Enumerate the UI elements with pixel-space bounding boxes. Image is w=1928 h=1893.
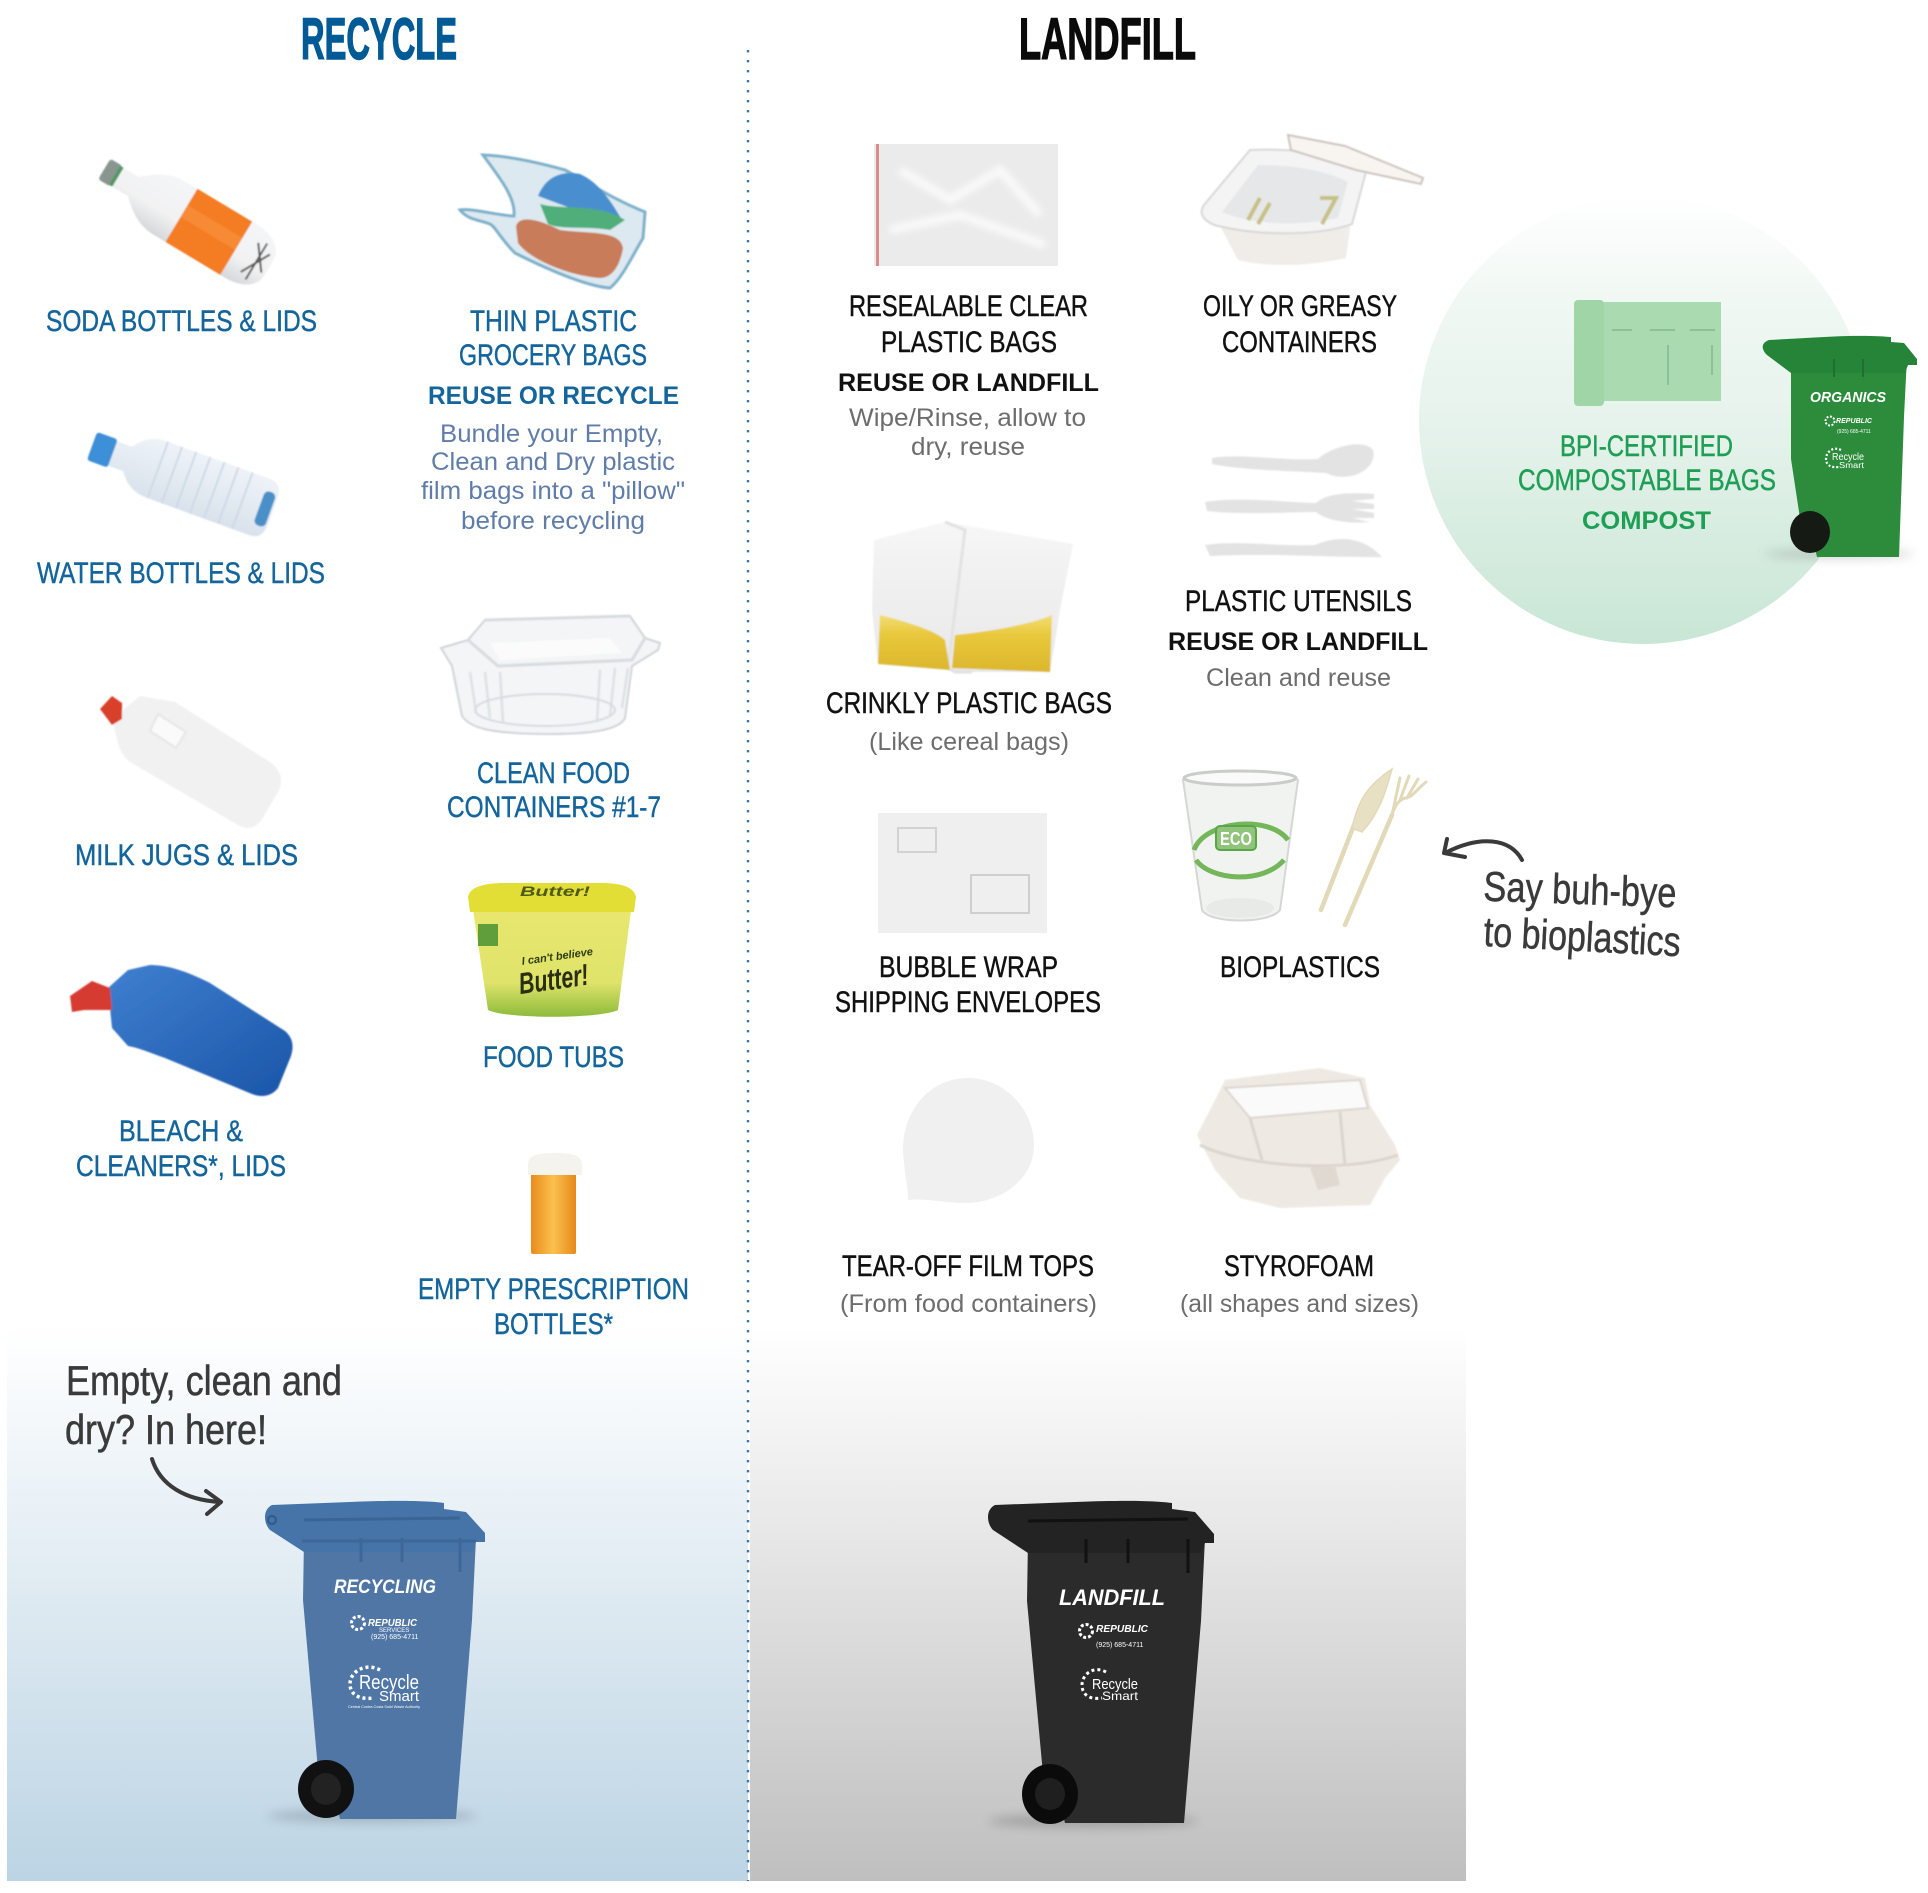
item: food tubs xyxy=(468,883,636,1074)
note: (all shapes and sizes) xyxy=(1180,1290,1419,1318)
bin label: ORGANICS xyxy=(1810,389,1886,406)
label: WATER BOTTLES & LIDS xyxy=(37,557,325,590)
logo: Smart xyxy=(1102,1689,1139,1703)
logo: REPUBLIC xyxy=(1096,1624,1149,1635)
item: tear-off film tops xyxy=(840,1078,1097,1318)
item: bleach xyxy=(70,965,293,1183)
label xyxy=(835,951,1101,1019)
label xyxy=(459,305,647,372)
label: TEAR-OFF FILM TOPS xyxy=(842,1250,1094,1283)
callout: say buh-bye xyxy=(1483,863,1682,965)
callout: empty, clean and dry: dry? In here! xyxy=(65,1406,267,1453)
panel: landfill gradient background xyxy=(750,1328,1466,1881)
label: BIOPLASTICS xyxy=(1220,951,1380,984)
callout: say buh-bye: to bioplastics xyxy=(1483,908,1682,965)
note: Clean and reuse xyxy=(1206,664,1391,692)
icon: margarine tub: Butter! xyxy=(517,959,591,1001)
label: BUBBLE WRAP xyxy=(879,951,1058,984)
icon: zip bag xyxy=(874,144,1058,266)
label: EMPTY PRESCRIPTION xyxy=(418,1273,689,1306)
icon: knife and fork xyxy=(1321,769,1426,925)
logo: REPUBLIC xyxy=(368,1618,418,1629)
logo xyxy=(1080,1624,1149,1703)
instruction heading: REUSE OR LANDFILL xyxy=(1168,628,1428,656)
icon: margarine tub xyxy=(468,883,636,1017)
icon: blue recycling bin xyxy=(265,1501,485,1823)
item: water bottles xyxy=(37,418,325,590)
label: BLEACH & xyxy=(119,1115,243,1148)
instruction heading: REUSE OR LANDFILL xyxy=(838,369,1099,397)
icon: envelope xyxy=(878,813,1047,933)
instruction text: film bags into a "pillow" xyxy=(421,477,685,505)
item: compostable bags xyxy=(1518,300,1776,535)
label: STYROFOAM xyxy=(1224,1250,1374,1283)
icon: foam clamshell xyxy=(1197,1068,1400,1208)
item: plastic utensils xyxy=(1168,444,1428,692)
logo: (925) 685-4711 xyxy=(1837,429,1871,435)
label xyxy=(418,1273,689,1341)
icon: margarine tub: I can't believe xyxy=(521,946,594,968)
instruction heading: COMPOST xyxy=(1582,507,1711,535)
label xyxy=(1203,290,1397,359)
label: CLEANERS*, LIDS xyxy=(76,1150,286,1183)
instruction text xyxy=(849,404,1086,461)
bin label: LANDFILL xyxy=(1059,1585,1165,1610)
item: resealable bags xyxy=(838,144,1099,461)
note: (From food containers) xyxy=(840,1290,1097,1318)
label: COMPOSTABLE BAGS xyxy=(1518,464,1776,497)
heading: landfill: LANDFILL xyxy=(1019,7,1196,72)
logo: REPUBLIC xyxy=(1836,416,1873,425)
logo: (925) 685-4711 xyxy=(1096,1642,1143,1649)
label xyxy=(849,290,1088,359)
label xyxy=(1518,430,1776,497)
icon: pill bottle xyxy=(528,1153,582,1254)
instruction text: before recycling xyxy=(461,507,645,535)
panel: recycle gradient background xyxy=(7,1328,748,1881)
icon: water bottle xyxy=(82,418,283,540)
label: CONTAINERS xyxy=(1222,326,1377,359)
label: CRINKLY PLASTIC BAGS xyxy=(826,687,1112,720)
item: oily containers xyxy=(1202,135,1423,359)
logo: Central Contra Costa Solid Waste Authority xyxy=(348,1704,420,1709)
heading: recycle: RECYCLE xyxy=(301,7,457,72)
instruction text xyxy=(421,420,685,535)
label: THIN PLASTIC xyxy=(470,305,637,338)
icon: bleach bottle xyxy=(70,965,293,1096)
logo xyxy=(1826,416,1873,470)
logo: Smart xyxy=(379,1688,420,1705)
icon: margarine tub: Butter! xyxy=(520,883,591,899)
instruction text: Wipe/Rinse, allow to xyxy=(849,404,1086,432)
callout: say buh-bye: Say buh-bye xyxy=(1483,863,1677,916)
arrow: to bioplastics xyxy=(1444,839,1522,860)
item: clean food containers xyxy=(441,616,661,824)
icon: green organics bin xyxy=(1763,336,1917,559)
icon: milk jug xyxy=(100,696,281,828)
label: CONTAINERS #1-7 xyxy=(447,791,661,824)
icon: grocery bag xyxy=(460,155,645,288)
label: BOTTLES* xyxy=(494,1308,613,1341)
item: thin plastic bags xyxy=(421,155,685,535)
item: milk jugs xyxy=(75,696,298,872)
label: SHIPPING ENVELOPES xyxy=(835,986,1101,1019)
instruction text: Bundle your Empty, xyxy=(440,420,663,448)
icon: black landfill bin xyxy=(988,1501,1214,1828)
label: OILY OR GREASY xyxy=(1203,290,1397,323)
logo: Recycle xyxy=(1832,452,1864,463)
label: PLASTIC UTENSILS xyxy=(1185,585,1412,618)
icon: clear clamshell xyxy=(441,616,660,734)
icon: film lid xyxy=(903,1078,1034,1203)
logo: Recycle xyxy=(359,1672,419,1694)
logo: (925) 685-4711 xyxy=(371,1634,418,1641)
icon: soda bottle xyxy=(88,142,285,294)
logo: Recycle xyxy=(1092,1676,1138,1693)
icon: cereal bags xyxy=(872,522,1073,672)
callout: empty, clean and dry: Empty, clean and xyxy=(66,1357,342,1404)
icon: compostable cup xyxy=(1183,771,1298,920)
item: crinkly plastic bags xyxy=(826,522,1112,756)
item: bioplastics xyxy=(1183,769,1426,984)
label: GROCERY BAGS xyxy=(459,339,647,372)
instruction text: Clean and Dry plastic xyxy=(431,448,675,476)
icon: spoon, fork, knife xyxy=(1205,444,1382,557)
icon: greasy tray xyxy=(1202,135,1423,265)
icon: compostable cup: ECO xyxy=(1220,829,1252,849)
icon: compost bag roll xyxy=(1574,300,1721,406)
label: FOOD TUBS xyxy=(483,1041,624,1074)
bin label: RECYCLING xyxy=(334,1577,436,1598)
callout: empty, clean and dry xyxy=(65,1357,342,1453)
item: bubble wrap envelopes xyxy=(835,813,1101,1019)
note: (Like cereal bags) xyxy=(869,728,1069,756)
label: MILK JUGS & LIDS xyxy=(75,839,298,872)
label: BPI-CERTIFIED xyxy=(1560,430,1733,463)
panel: compost circle xyxy=(1419,196,1867,644)
arrow: to recycling bin xyxy=(152,1459,221,1514)
instruction text: dry, reuse xyxy=(911,433,1025,461)
logo xyxy=(348,1616,420,1709)
logo: SERVICES xyxy=(379,1628,409,1634)
label xyxy=(76,1115,286,1183)
item: prescription bottles xyxy=(418,1153,689,1341)
label: RESEALABLE CLEAR xyxy=(849,290,1088,323)
instruction heading: REUSE OR RECYCLE xyxy=(428,382,679,410)
logo: Smart xyxy=(1839,461,1865,470)
label: CLEAN FOOD xyxy=(477,757,630,790)
label: SODA BOTTLES & LIDS xyxy=(46,305,317,338)
item: soda bottles xyxy=(46,142,317,338)
label: PLASTIC BAGS xyxy=(881,326,1057,359)
item: styrofoam xyxy=(1180,1068,1419,1318)
label xyxy=(447,757,661,824)
